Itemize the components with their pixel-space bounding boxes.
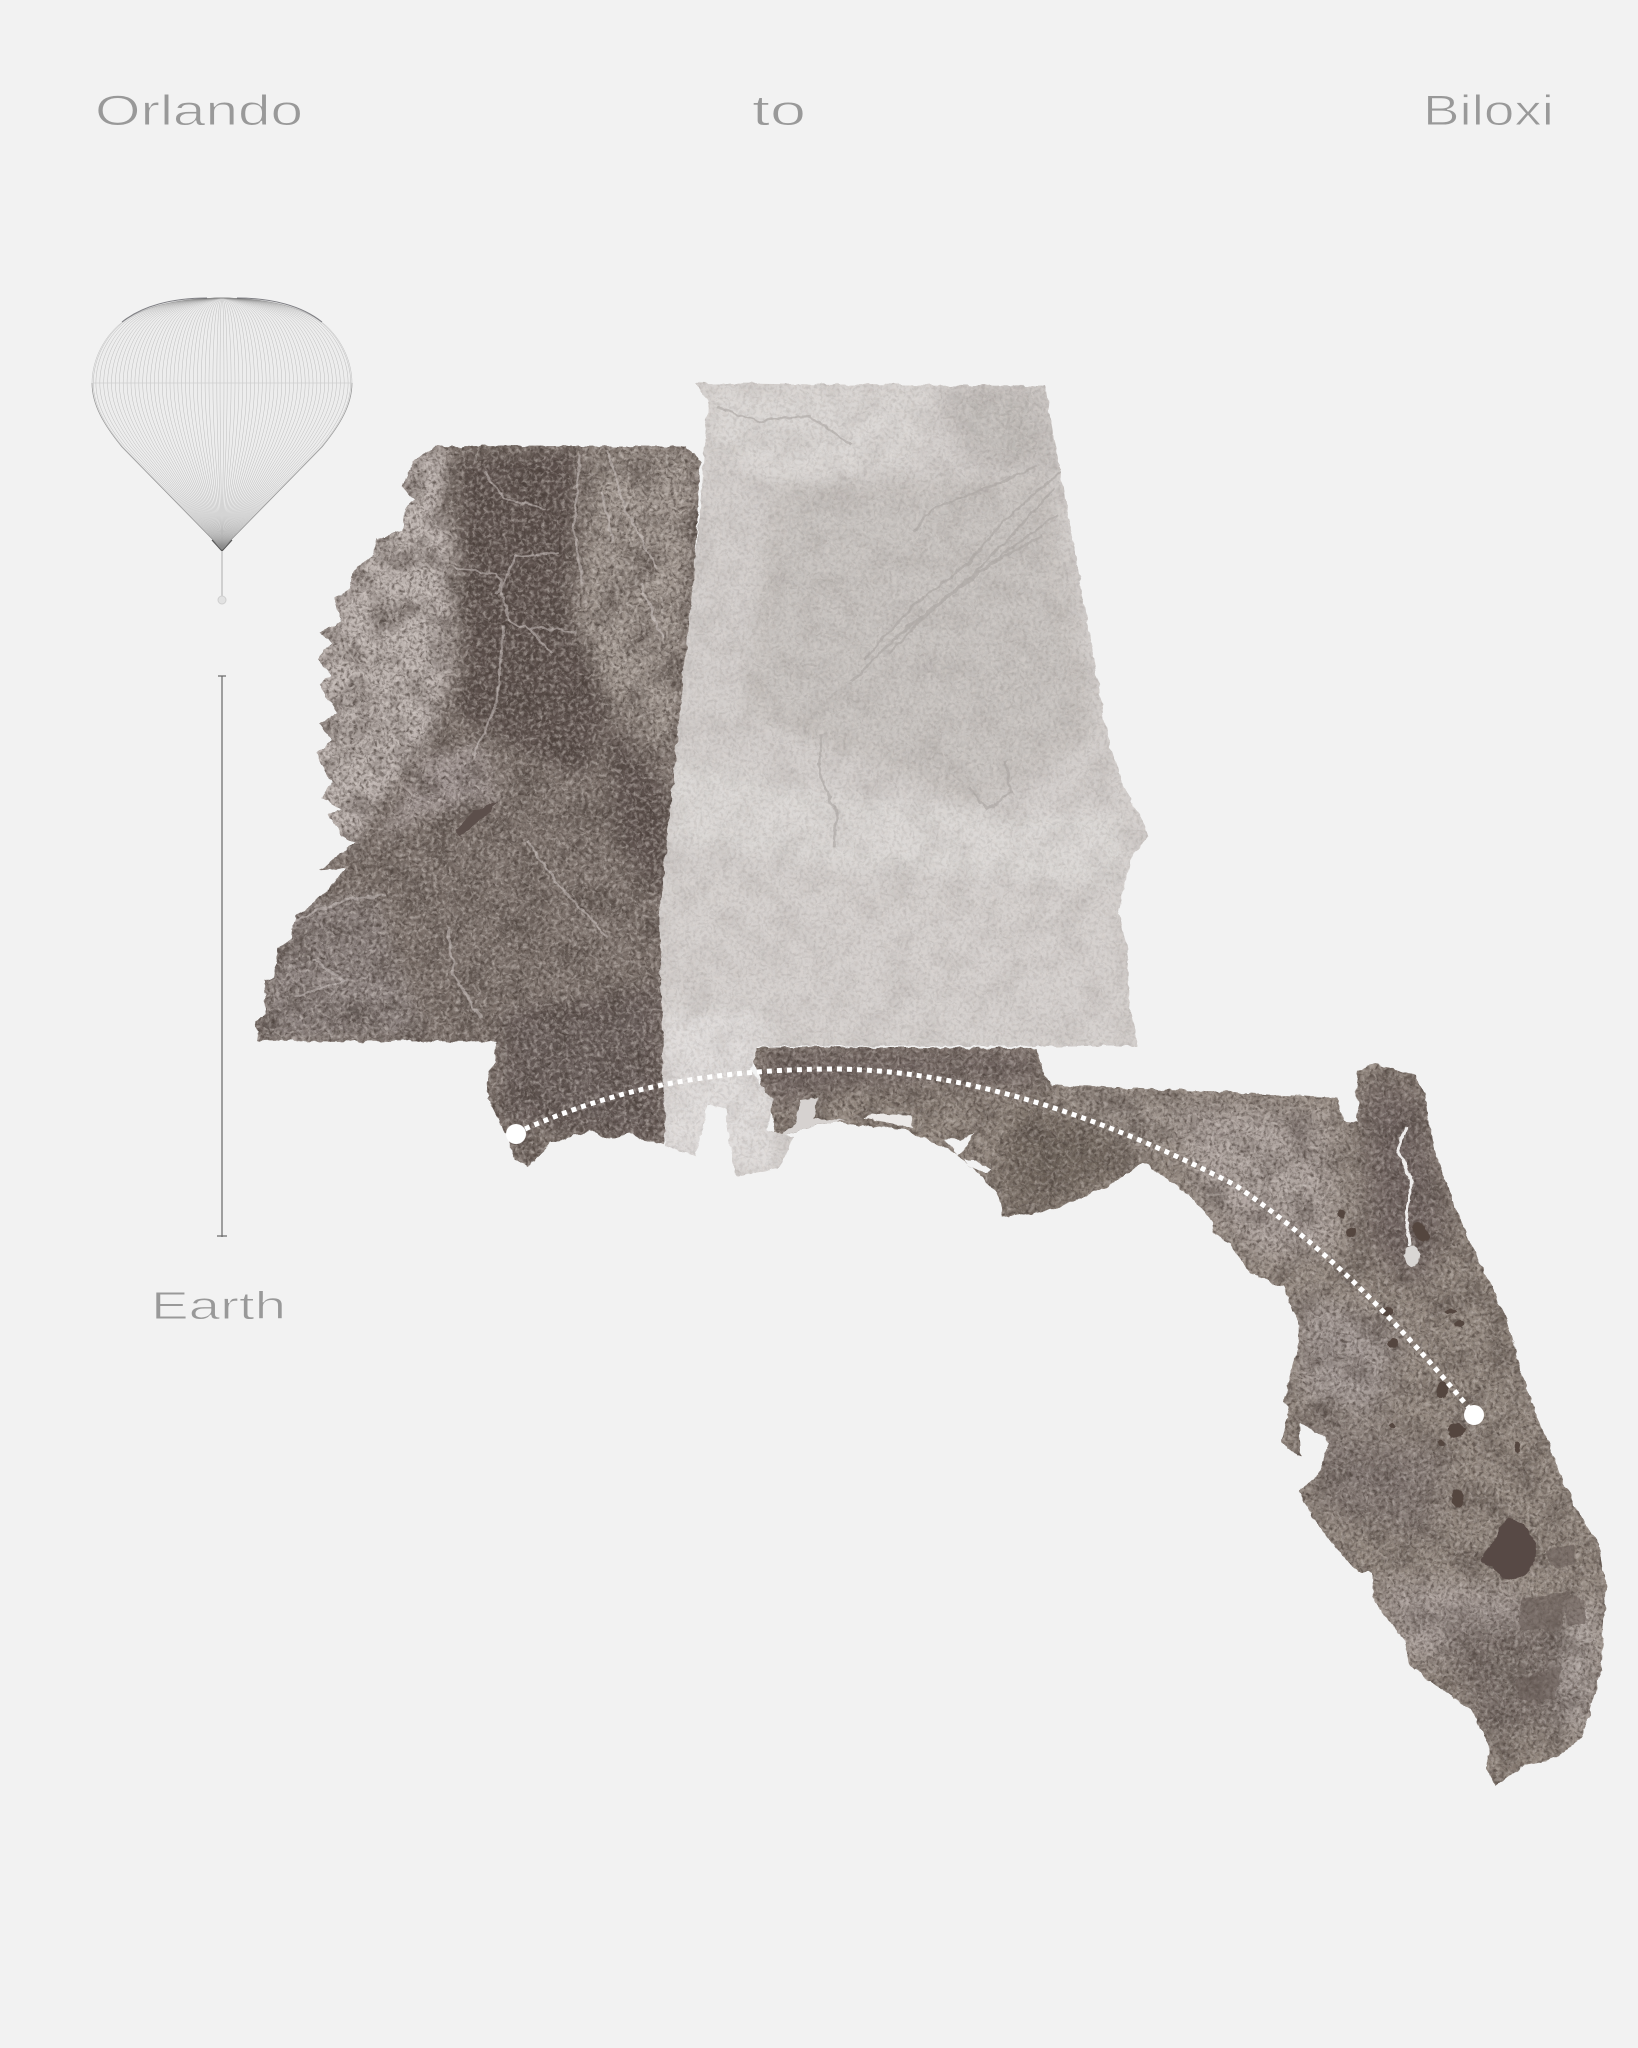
icon: high altitude balloon — [92, 298, 352, 604]
coastal bays — [862, 1113, 914, 1128]
St Johns river — [1398, 1127, 1412, 1245]
altitude scale line — [217, 676, 227, 1237]
map: Mississippi — [240, 440, 720, 1180]
map: Florida — [740, 1040, 1620, 1800]
ridges and rivers — [718, 407, 1060, 847]
marker: Orlando — [1464, 1405, 1484, 1425]
marker: Biloxi — [506, 1124, 526, 1144]
texture — [740, 1040, 1620, 1800]
map: Alabama — [658, 382, 1148, 1176]
texture — [240, 440, 720, 1180]
dark wetland blocks — [1515, 1545, 1585, 1700]
label: Earth: Earth — [151, 1285, 286, 1328]
river valleys — [277, 450, 662, 1018]
title: Orlando: Orlando — [95, 87, 303, 135]
reservoir — [455, 801, 497, 836]
lake Okeechobee — [1482, 1518, 1537, 1580]
texture — [660, 388, 1146, 1168]
title: Biloxi: Biloxi — [1423, 87, 1554, 135]
small lakes — [1337, 1209, 1520, 1507]
title: to: to — [752, 87, 806, 135]
flight path: dotted arc — [516, 1069, 1474, 1414]
